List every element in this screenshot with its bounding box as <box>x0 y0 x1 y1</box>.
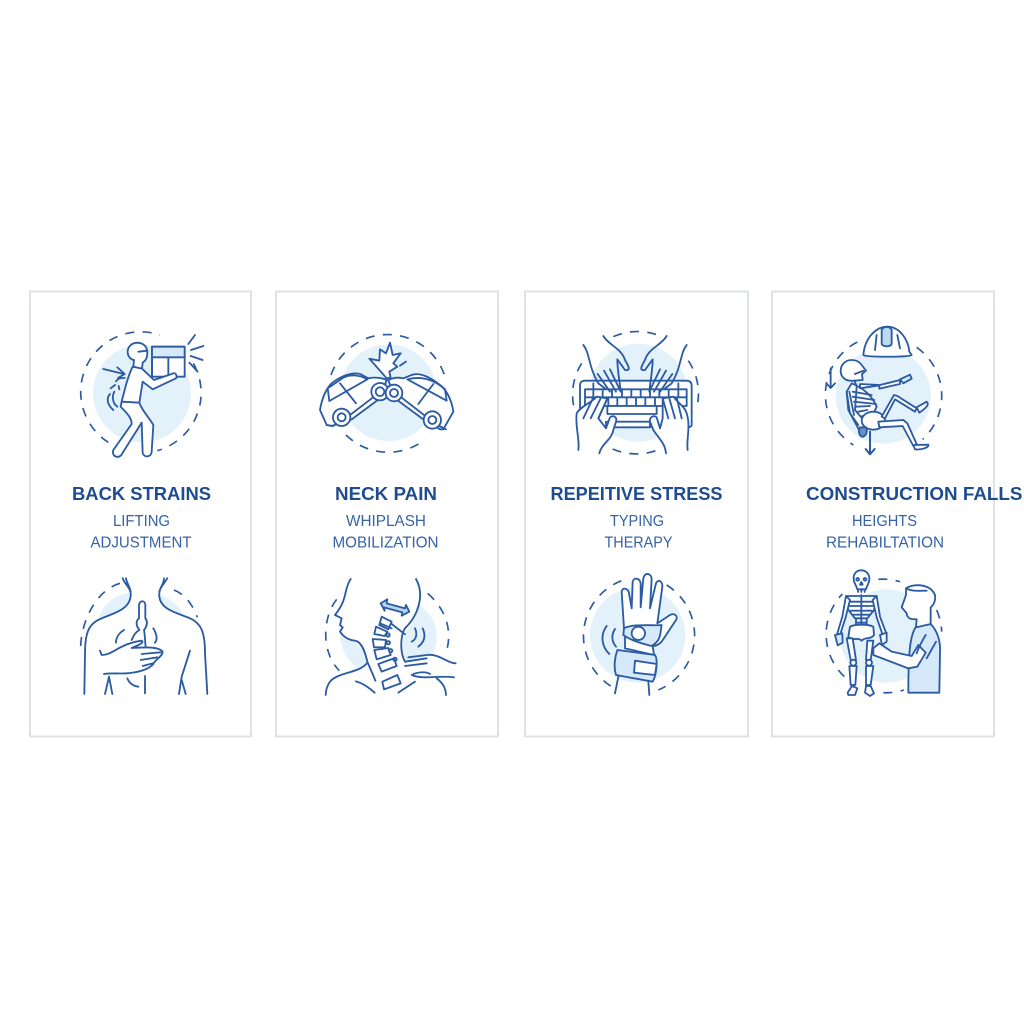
text: rehabilitation: REHABILTATION <box>826 534 944 552</box>
panel: back strains <box>30 292 251 736</box>
text: mobilization: MOBILIZATION <box>332 534 438 552</box>
panel: construction falls <box>772 292 1022 736</box>
panel: neck pain <box>276 292 498 736</box>
icon: wrist brace <box>583 574 695 695</box>
heading: construction falls: CONSTRUCTION FALLS <box>806 483 1022 504</box>
heading: neck pain: NECK PAIN <box>335 483 437 504</box>
text: therapy: THERAPY <box>604 534 672 552</box>
icon: car crash <box>320 335 453 452</box>
icon: neck and spine mobilization <box>326 579 456 695</box>
text: adjustment: ADJUSTMENT <box>90 534 192 552</box>
text: heights: HEIGHTS <box>852 513 917 530</box>
text: whiplash: WHIPLASH <box>346 513 426 530</box>
panel: repetitive stress <box>525 292 748 736</box>
icon: falling skeleton with helmet <box>825 327 942 454</box>
icon: hands typing on keyboard <box>573 332 698 454</box>
text: typing: TYPING <box>610 513 664 530</box>
icon: back adjustment <box>81 578 207 694</box>
icon: person lifting box <box>81 332 203 457</box>
text: lifting: LIFTING <box>113 513 170 530</box>
heading: back strains: BACK STRAINS <box>72 483 211 504</box>
heading: repetitive stress: REPEITIVE STRESS <box>550 483 722 504</box>
icon: skeleton and therapist <box>826 570 942 696</box>
